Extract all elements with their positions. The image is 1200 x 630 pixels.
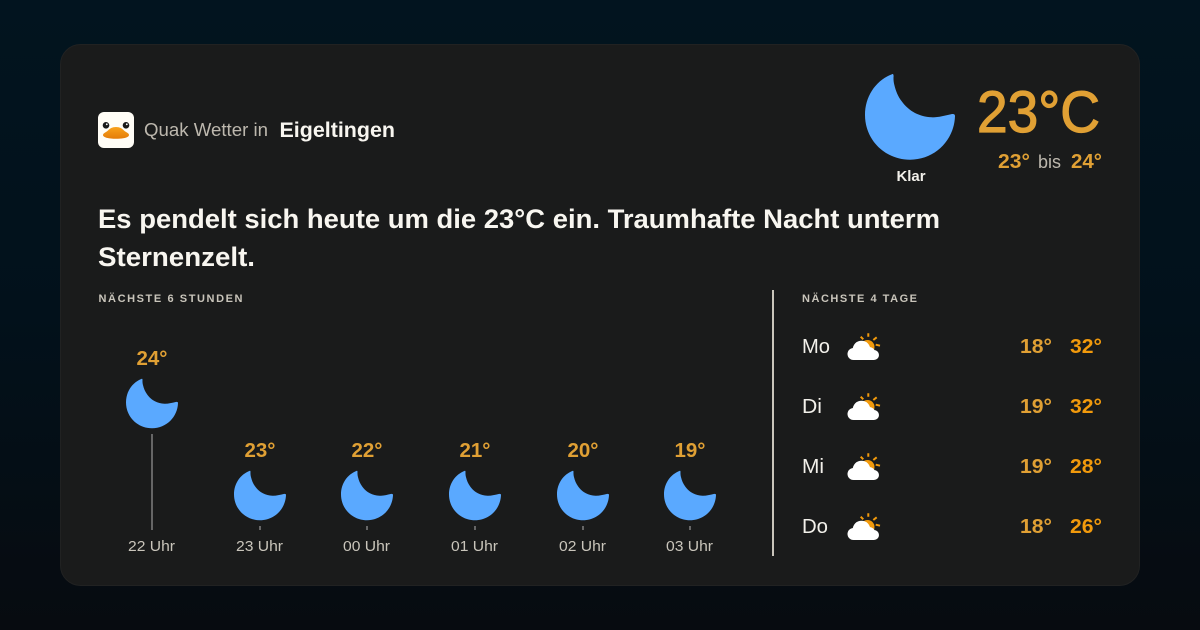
text: temperature range: 23° [998, 151, 1030, 173]
header: brand and location [98, 112, 395, 148]
text: location: Eigeltingen [280, 119, 395, 142]
hour column: 01 Uhr: 01 Uhr [451, 539, 498, 555]
headline [98, 204, 940, 272]
day row: Montag: Mo [802, 336, 830, 358]
day row: Donnerstag [802, 513, 1102, 540]
panel: next 4 days [802, 292, 1102, 540]
day row: Montag: 18° [1020, 336, 1052, 358]
day row: Dienstag: 32° [1070, 396, 1102, 418]
hour column: 23 Uhr: 23 Uhr [236, 539, 283, 555]
hour column: 02 Uhr: 20° [568, 440, 598, 462]
text: temperature range: bis [1038, 152, 1061, 172]
text: temperature range: 24° [1071, 151, 1102, 173]
day row: Donnerstag: 18° [1020, 516, 1052, 538]
text: condition: Klar [896, 169, 926, 185]
hour column: 23 Uhr [234, 440, 286, 555]
hour column: 03 Uhr [664, 440, 716, 555]
text: temperature range [998, 151, 1102, 173]
heading: next 6 hours: NÄCHSTE 6 STUNDEN [98, 292, 243, 305]
day row: Montag: 32° [1070, 336, 1102, 358]
text: current temperature: 23°C [977, 80, 1100, 145]
headline: Sternenzelt. [98, 242, 255, 272]
text: brand: Quak Wetter in [144, 120, 268, 140]
day row: Donnerstag: Do [802, 516, 828, 538]
hour column: 00 Uhr: 22° [352, 440, 382, 462]
day row: Montag [802, 333, 1102, 360]
day row: Mittwoch: 19° [1020, 456, 1052, 478]
hour column: 23 Uhr: 23° [244, 440, 276, 462]
hour column: 22 Uhr [126, 348, 178, 555]
hour column: 02 Uhr [557, 440, 609, 555]
hour column: 01 Uhr: 21° [460, 440, 490, 462]
day row: Mittwoch: 28° [1070, 456, 1102, 478]
day row: Dienstag: 19° [1020, 396, 1052, 418]
headline: Es pendelt sich heute um die 23°C ein. Traumhafte Nacht unterm [98, 204, 940, 234]
hour column: 00 Uhr: 00 Uhr [343, 539, 390, 555]
panel: next 6 hours [98, 292, 716, 555]
hour column: 03 Uhr: 03 Uhr [666, 539, 713, 555]
hour column: 22 Uhr: 24° [136, 348, 168, 370]
hour column: 03 Uhr: 19° [674, 440, 706, 462]
heading: next 4 days: NÄCHSTE 4 TAGE [802, 292, 917, 305]
icon: duck logo [98, 112, 134, 148]
current conditions [865, 74, 1102, 185]
hour column: 22 Uhr: 22 Uhr [128, 539, 175, 555]
day row: Mittwoch [802, 453, 1102, 480]
day row: Mittwoch: Mi [802, 456, 824, 478]
hour column: 02 Uhr: 02 Uhr [559, 539, 606, 555]
day row: Donnerstag: 26° [1070, 516, 1102, 538]
day row: Dienstag: Di [802, 396, 822, 418]
day row: Dienstag [802, 393, 1102, 420]
hour column: 00 Uhr [341, 440, 393, 555]
icon: large moon [865, 74, 955, 160]
hour column: 01 Uhr [449, 440, 501, 555]
panel: weather card [60, 44, 1140, 586]
